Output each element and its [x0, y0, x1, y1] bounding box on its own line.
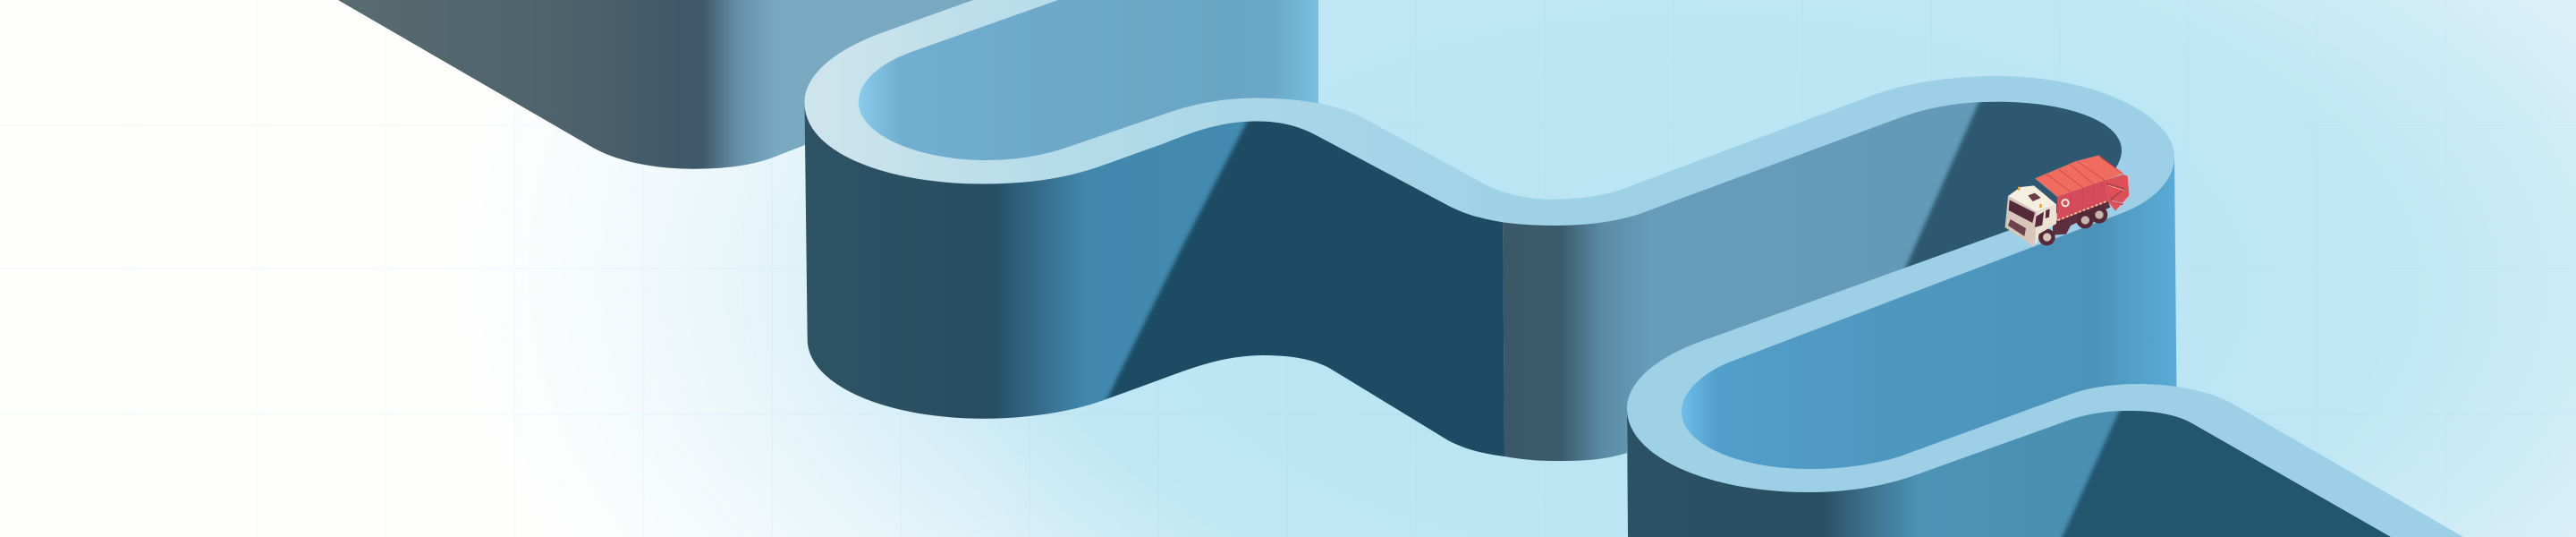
tailgate struts	[2106, 183, 2124, 205]
container top	[2035, 155, 2123, 197]
side windows	[2035, 209, 2050, 227]
far wall: middle section with shadow	[1503, 102, 2122, 461]
inner wall: second pocket	[1655, 157, 2177, 481]
truck wheels	[2076, 206, 2107, 228]
cab side	[2035, 204, 2056, 245]
grille	[2008, 219, 2026, 236]
truck chassis	[2053, 200, 2110, 235]
windshield	[2009, 200, 2035, 223]
recycling badge	[2062, 200, 2069, 206]
front wall: first curve with shadow	[796, 90, 1512, 470]
back wall: top left	[338, 0, 984, 169]
cab front wheel	[2038, 229, 2055, 245]
yellow warning strip	[2058, 201, 2107, 220]
amber lamps	[2018, 187, 2042, 208]
shadow on middle wall	[1902, 102, 2122, 268]
front wall: lower curve with shadow	[1627, 410, 2391, 537]
tailgate highlights	[2108, 185, 2124, 203]
shadow on lower wall	[2059, 411, 2391, 537]
inner wall: first pocket	[832, 0, 1318, 170]
cab roof	[2008, 185, 2056, 212]
container side	[2057, 181, 2108, 221]
roof hatch	[2028, 193, 2041, 201]
truck tailgate	[2105, 175, 2129, 211]
icon: red garbage truck	[2005, 155, 2129, 247]
shadow on first wall	[1104, 122, 1504, 456]
winding road ribbon	[805, 0, 2463, 537]
cab front	[2005, 196, 2037, 247]
container ribs	[2046, 156, 2123, 216]
